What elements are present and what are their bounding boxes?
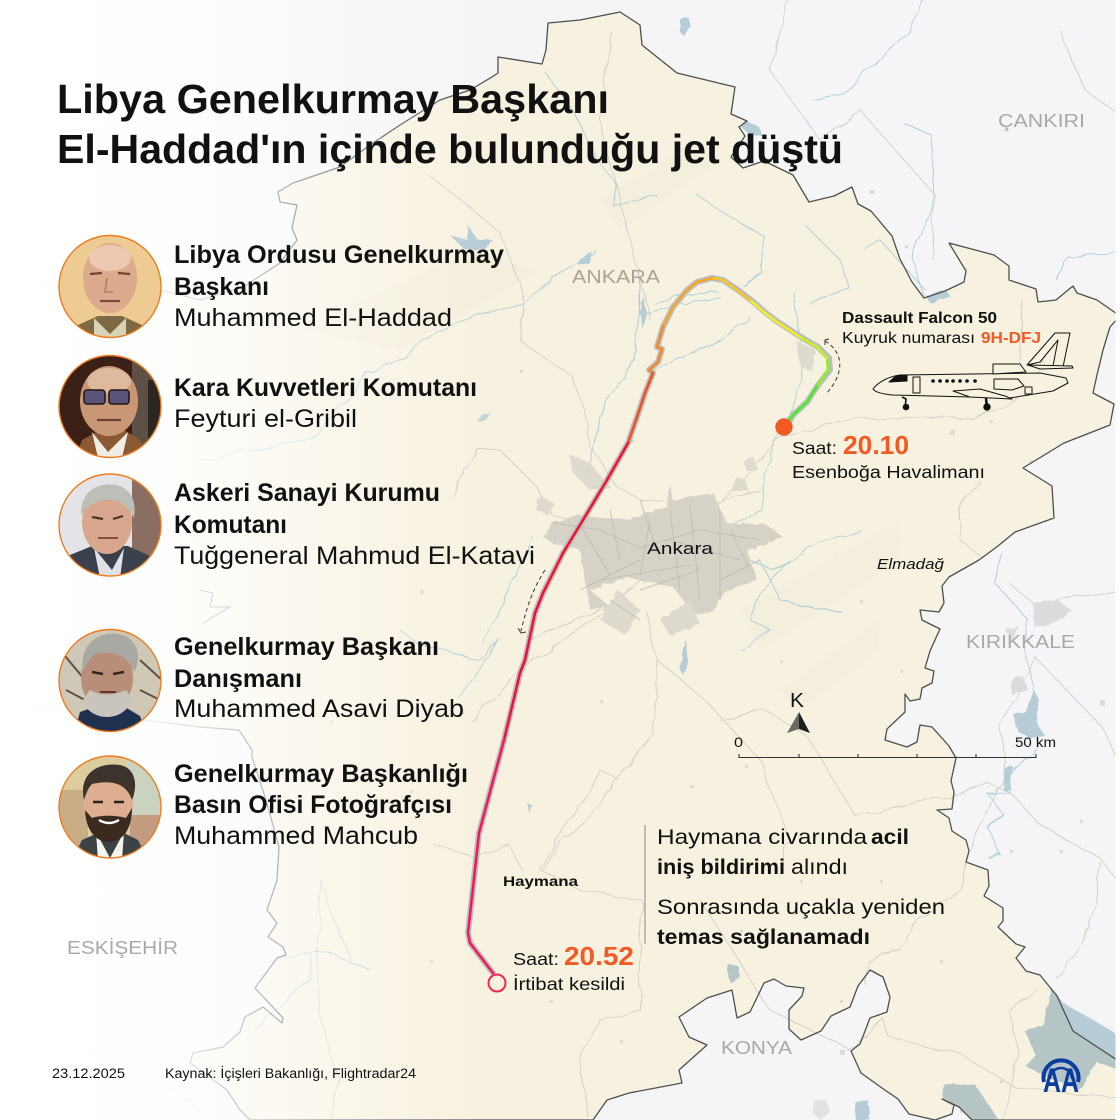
western fade overlay [0,0,480,1120]
callout: emergency landing note: Sonrasında uçakla yeniden [657,896,945,919]
crash point [488,974,506,992]
scale bar: 0 [734,735,743,750]
crash label: Saat: [513,949,559,969]
track halo [468,278,830,973]
person 5 text [174,760,468,850]
person 4 portrait [58,629,162,733]
aircraft label: 9H-DFJ [981,330,1041,347]
small towns [330,190,1105,1113]
label: Kırıkkale: KIRIKKALE [966,632,1075,652]
person 4 text: Muhammed Asavi Diyab [174,695,464,723]
flight path [468,278,830,973]
person 3 text: Tuğgeneral Mahmud El-Katavi [174,542,535,570]
person 1 ring [59,236,161,338]
departure label: Esenboğa Havalimanı [792,462,985,482]
crash label: İrtibat kesildi [513,974,625,994]
aircraft label [842,310,1041,347]
label: Ankara province: ANKARA [572,267,660,287]
person 4 text: Genelkurmay Başkanı [174,633,439,661]
hillshade texture [300,140,900,710]
person 5 ring [59,756,161,858]
callout: emergency landing note: temas sağlanamadı [657,926,870,949]
enclave border [200,590,230,623]
direction arrow: northbound [825,339,840,394]
person 3 ring [59,474,161,576]
person 5 text: Muhammed Mahcub [174,822,418,850]
person 4 text [174,633,464,723]
direction arrow: southbound [518,570,545,633]
white right margin [1116,0,1120,1120]
person 1 portrait [58,235,162,340]
person 1 text: Libya Ordusu Genelkurmay [174,241,504,269]
label: Konya: KONYA [721,1038,792,1058]
departure label [792,430,985,482]
callout: emergency landing note: iniş bildirimi [657,856,785,879]
city label: Ankara: Ankara [647,539,714,558]
label: Çankırı: ÇANKIRI [998,111,1085,131]
person 1 text [174,241,504,332]
logo: Anadolu Agency: AA [1043,1062,1079,1100]
title [57,76,843,172]
town label: Elmadağ: Elmadağ [877,557,944,573]
water over cream [942,988,1120,1120]
person 2 ring [59,356,161,458]
province area [254,12,1116,1120]
region labels [67,111,1085,1058]
person 2 text: Feyturi el-Gribil [174,405,357,433]
aircraft label: Kuyruk numarası [842,330,975,347]
track colour segments [468,278,828,973]
callout: emergency landing note: acil [871,826,909,849]
person 1 text: Muhammed El-Haddad [174,304,452,332]
date: 23.12.2025 [52,1066,125,1081]
person 2 text: Kara Kuvvetleri Komutanı [174,374,477,402]
crash label [513,941,634,994]
scale bar [734,735,1056,758]
person 3 text: Askeri Sanayi Kurumu [174,479,440,507]
title: El-Haddad'ın içinde bulunduğu jet düştü [57,126,843,172]
Ankara city area [536,340,1073,695]
person 3 text: Komutanı [174,511,287,539]
roads [318,0,1120,1120]
source: Kaynak: İçişleri Bakanlığı, Flightradar24 [165,1066,417,1081]
person 3 text [174,479,535,570]
scale bar: 50 km [1015,735,1056,750]
town label: Haymana: Haymana [503,874,579,889]
departure label: Saat: [792,438,837,458]
callout: emergency landing note [645,825,945,949]
crash label: 20.52 [564,941,634,971]
label: Eskişehir: ESKİŞEHİR [67,938,178,958]
person 2 text [174,374,477,433]
person 5 text: Basın Ofisi Fotoğrafçısı [174,791,452,819]
north arrow [787,690,810,733]
person 2 portrait [58,355,162,460]
aircraft label: Dassault Falcon 50 [842,310,997,327]
callout: emergency landing note: alındı [791,856,848,879]
person 3 portrait [58,474,162,578]
person 1 text: Başkanı [174,273,269,301]
departure point [775,418,793,436]
person 4 ring [59,630,161,732]
north arrow: K [790,690,805,712]
callout: emergency landing note: Haymana civarında [657,826,867,849]
departure label: 20.10 [843,430,909,460]
person 5 portrait [58,756,162,860]
title: Libya Genelkurmay Başkanı [57,76,609,122]
lakes and reservoirs [450,17,1120,1120]
person 5 text: Genelkurmay Başkanlığı [174,760,468,788]
icon: Falcon 50 aircraft [873,333,1073,410]
person 4 text: Danışmanı [174,665,302,693]
